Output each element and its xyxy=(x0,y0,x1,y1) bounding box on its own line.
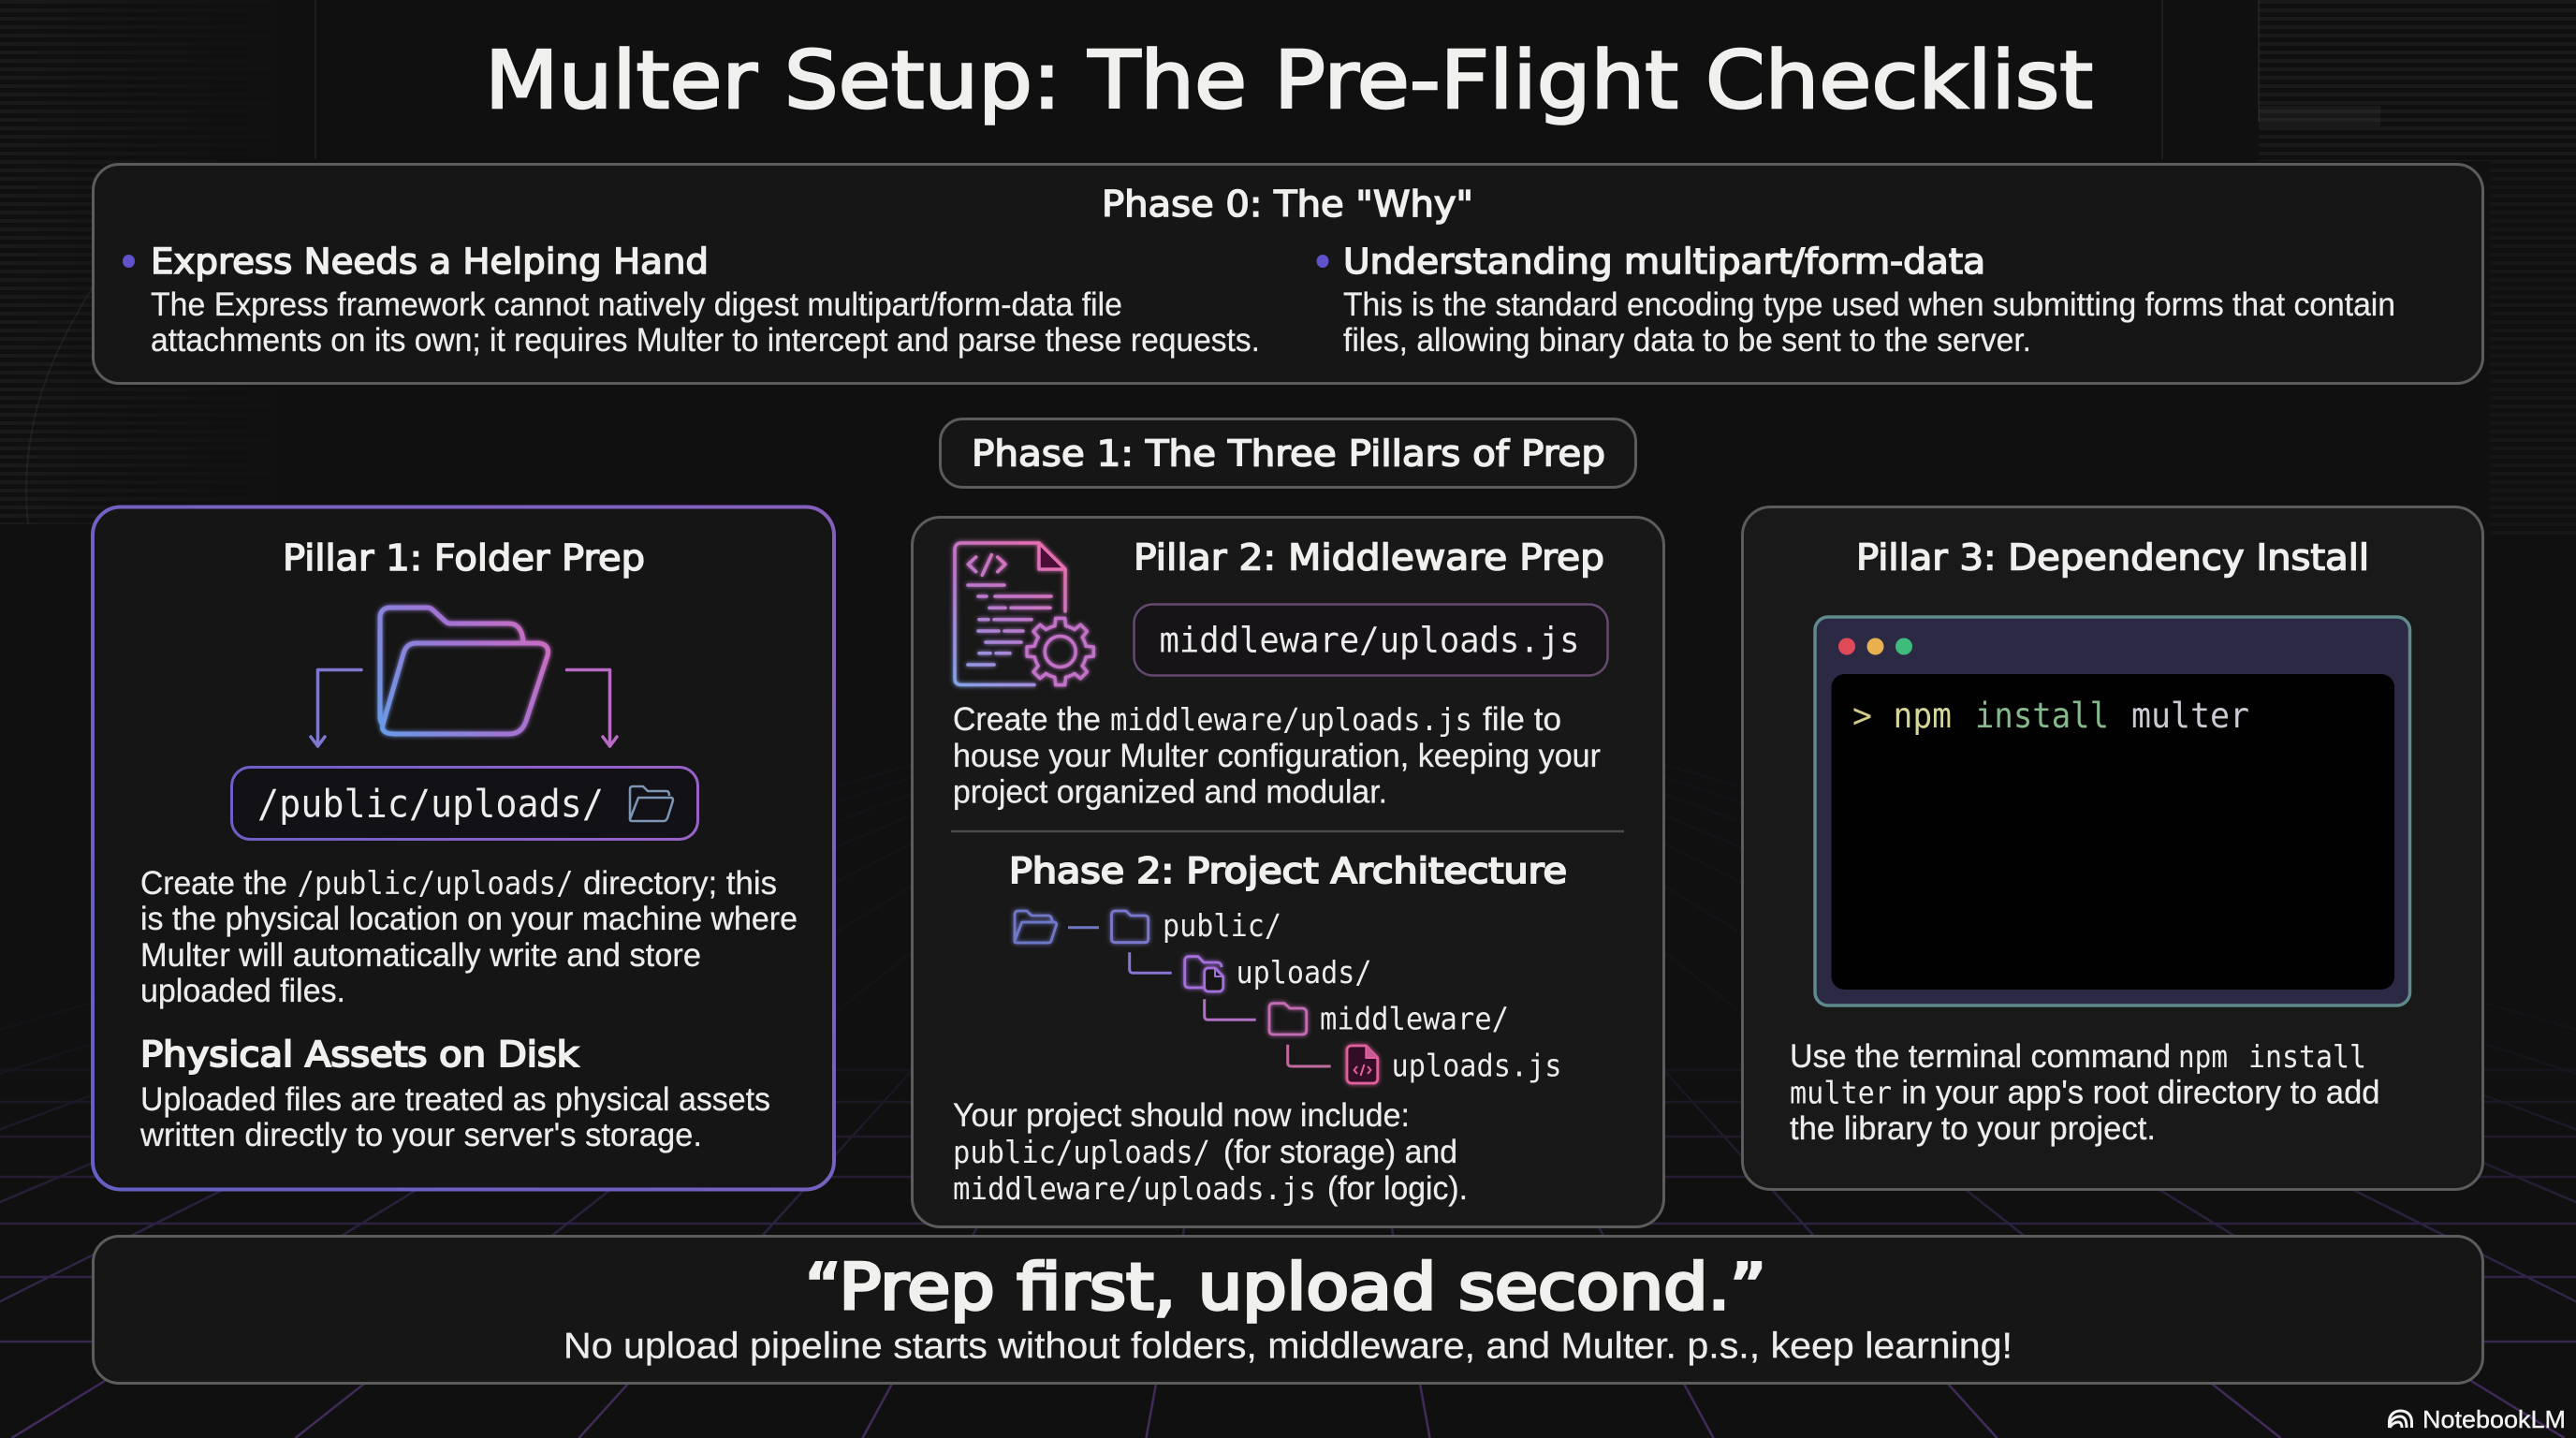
body text: Multer will automatically write and store xyxy=(140,937,701,974)
body text: /public/uploads/ xyxy=(298,865,573,902)
command: > xyxy=(1852,696,1872,736)
body text xyxy=(139,1081,770,1153)
icon: middleware folder xyxy=(1269,1004,1307,1034)
body text: The Express framework cannot natively digest multipart/form-data file xyxy=(151,286,1122,323)
label: uploads: uploads/ xyxy=(1236,954,1372,990)
filename pill: middleware/uploads.js xyxy=(1159,620,1580,661)
command: install xyxy=(1975,696,2109,736)
subheading: Express Needs a Helping Hand xyxy=(151,242,709,282)
label: uploads.js: uploads.js xyxy=(1391,1047,1561,1084)
body text xyxy=(953,1097,1468,1207)
icon: small folder xyxy=(630,786,673,821)
terminal window xyxy=(1815,617,2409,1005)
heading: phase 2: Phase 2: Project Architecture xyxy=(1009,851,1567,891)
title: Multer Setup: The Pre-Flight Checklist xyxy=(485,35,2093,127)
heading: pillar 3: Pillar 3: Dependency Install xyxy=(1856,537,2369,579)
icon: code document with gear xyxy=(955,543,1094,685)
body text: public/uploads/ xyxy=(953,1134,1210,1170)
panel: pillar 2 xyxy=(912,517,1664,1226)
heading pill: phase 1 xyxy=(940,419,1636,487)
body text: install xyxy=(2248,1038,2366,1075)
body text: npm xyxy=(2178,1038,2228,1075)
body text: in your app's root directory to add xyxy=(1902,1075,2379,1110)
subheading: Understanding multipart/form-data xyxy=(1343,242,1985,282)
icon: uploads folder xyxy=(1185,957,1223,991)
subheading: physical assets: Physical Assets on Disk xyxy=(140,1034,579,1075)
column: multipart xyxy=(1316,242,2395,359)
body text: Create the xyxy=(140,865,287,902)
column: express xyxy=(123,242,1260,359)
body text: attachments on its own; it requires Multer to intercept and parse these requests. xyxy=(151,322,1260,359)
body text: This is the standard encoding type used when submitting forms that contain xyxy=(1343,286,2395,323)
bullet xyxy=(1316,255,1329,268)
body text: Your project should now include: xyxy=(953,1097,1410,1134)
label: middleware: middleware/ xyxy=(1320,1000,1509,1037)
body text: (for storage) and xyxy=(1223,1134,1457,1170)
label: public: public/ xyxy=(1163,907,1281,944)
bullet xyxy=(123,255,135,268)
body text: (for logic). xyxy=(1327,1170,1468,1207)
icon: public folder xyxy=(1112,911,1149,943)
body text xyxy=(1343,286,2395,359)
body text xyxy=(140,865,798,1009)
body text: Uploaded files are treated as physical assets xyxy=(140,1081,770,1118)
path box: /public/uploads/ xyxy=(257,781,604,826)
heading: pillar 1: Pillar 1: Folder Prep xyxy=(283,537,645,579)
heading: phase 0: Phase 0: The "Why" xyxy=(1102,183,1473,225)
icon: root folder xyxy=(1015,911,1057,943)
body text xyxy=(953,701,1601,811)
filename pill xyxy=(1134,605,1608,676)
panel: phase 0 xyxy=(94,165,2482,384)
command: npm xyxy=(1893,696,1952,736)
body text: files, allowing binary data to be sent to the server. xyxy=(1343,322,2031,359)
panel: closing quote xyxy=(94,1236,2482,1384)
body text: project organized and modular. xyxy=(953,773,1387,811)
body text: written directly to your server's storage. xyxy=(139,1117,702,1153)
body text: the library to your project. xyxy=(1790,1110,2156,1147)
panel: pillar 1 xyxy=(93,507,834,1189)
body text: uploaded files. xyxy=(140,973,345,1009)
body text: directory; this xyxy=(583,865,777,902)
body text: multer xyxy=(1790,1075,1892,1110)
heading pill: phase 1: Phase 1: The Three Pillars of Prep xyxy=(972,433,1605,474)
command xyxy=(1852,696,2249,736)
body text: middleware/uploads.js xyxy=(953,1170,1316,1207)
quote: “Prep first, upload second.” xyxy=(805,1251,1766,1325)
panel: pillar 3 xyxy=(1743,507,2482,1189)
window controls xyxy=(1838,638,1912,655)
arrow: right xyxy=(567,670,617,746)
body text: Use the terminal command xyxy=(1790,1038,2171,1075)
body text: house your Multer configuration, keeping your xyxy=(953,738,1601,774)
body text: Create the xyxy=(953,701,1101,738)
body text: file to xyxy=(1483,701,1561,738)
command: multer xyxy=(2131,696,2249,736)
body text: middleware/uploads.js xyxy=(1110,701,1472,738)
file tree xyxy=(1015,907,1561,1084)
icon: js file xyxy=(1347,1046,1378,1083)
arrow: left xyxy=(311,670,361,746)
body text xyxy=(1790,1038,2379,1147)
path box xyxy=(232,768,698,839)
subline: No upload pipeline starts without folders, middleware, and Multer. p.s., keep learning! xyxy=(564,1326,2012,1367)
icon: open folder xyxy=(380,608,549,734)
brand: NotebookLM: NotebookLM xyxy=(2422,1405,2566,1433)
heading: pillar 2: Pillar 2: Middleware Prep xyxy=(1134,537,1604,579)
body text xyxy=(151,286,1260,359)
icon: NotebookLM arcs xyxy=(2389,1411,2411,1428)
body text: is the physical location on your machine where xyxy=(140,901,798,937)
